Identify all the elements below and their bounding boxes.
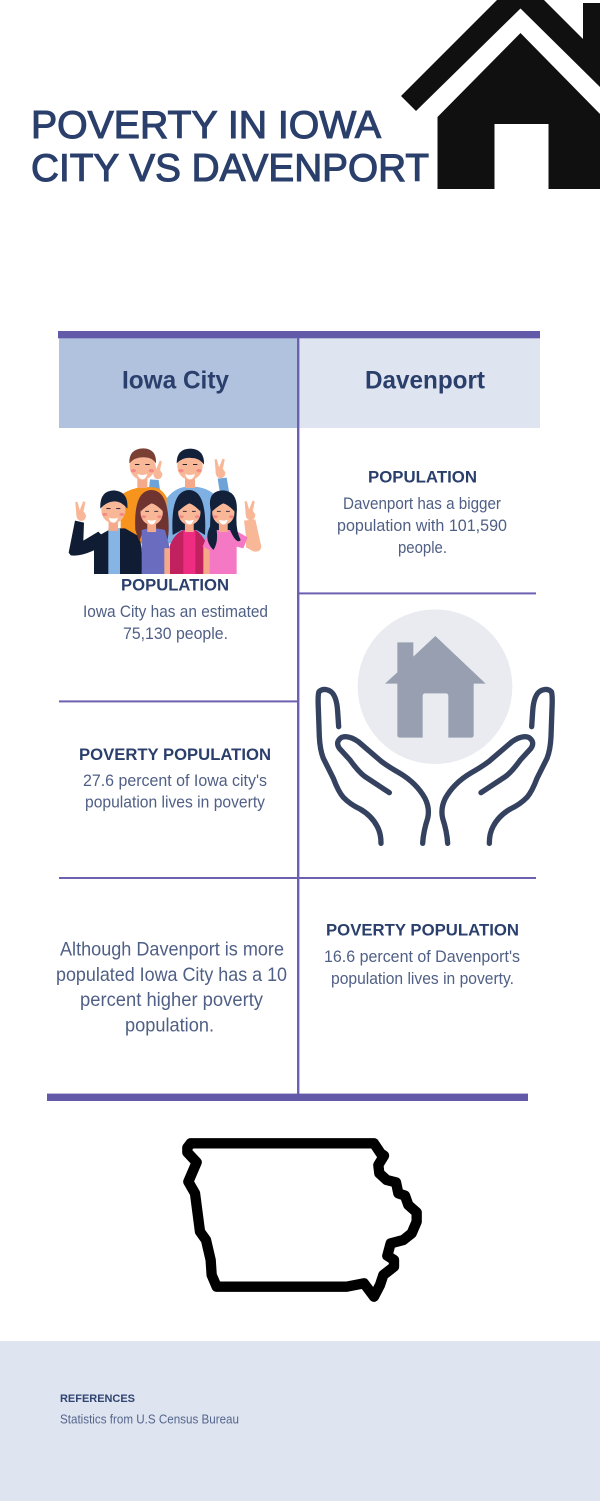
title <box>31 104 429 190</box>
text block: Iowa City poverty population: 27.6 percent of Iowa city's <box>83 771 267 790</box>
title: CITY VS DAVENPORT <box>31 147 429 190</box>
text block: Iowa City population: 75,130 people. <box>123 624 228 643</box>
icon: black house <box>401 0 600 189</box>
footer: references <box>0 1341 600 1501</box>
text block: Davenport population <box>337 468 507 557</box>
text block: Iowa City poverty population: POVERTY POPULATION <box>79 745 271 764</box>
text block: comparison statement: populated Iowa City has a 10 <box>56 964 287 986</box>
text block: Iowa City population: Iowa City has an estimated <box>83 602 268 621</box>
illustration: group of people <box>69 448 261 574</box>
text block: Davenport poverty population: POVERTY POPULATION <box>326 920 519 940</box>
text block: Iowa City poverty population <box>79 745 271 812</box>
icon: Iowa state outline <box>187 1143 417 1297</box>
text block: comparison statement: population. <box>125 1014 214 1036</box>
circle behind house <box>358 609 512 764</box>
table header: Davenport <box>299 338 540 428</box>
right hand <box>442 689 552 843</box>
house silhouette <box>385 636 486 738</box>
table header: Davenport: Davenport <box>365 366 486 394</box>
text block: Iowa City population: POPULATION <box>121 576 229 594</box>
table header: Iowa City <box>59 338 298 428</box>
text block: Davenport population: POPULATION <box>368 468 477 486</box>
text block: Davenport poverty population <box>324 920 520 988</box>
text block: Davenport population: Davenport has a bigger <box>343 494 501 513</box>
text block: Davenport poverty population: 16.6 percent of Davenport's <box>324 947 520 966</box>
text block: Iowa City population <box>83 576 268 643</box>
references source: Statistics from U.S Census Bureau <box>60 1412 239 1426</box>
title: POVERTY IN IOWA <box>31 104 381 147</box>
icon: hands holding a house <box>318 609 552 843</box>
text block: Iowa City poverty population: population lives in poverty <box>85 792 265 812</box>
text block: Davenport population: population with 101,590 <box>337 516 507 535</box>
table header: Iowa City: Iowa City <box>122 366 229 394</box>
left hand <box>318 689 428 843</box>
text block: Davenport poverty population: population lives in poverty. <box>331 969 514 988</box>
references heading: REFERENCES <box>60 1393 135 1405</box>
text block: comparison statement: Although Davenport is more <box>60 938 284 960</box>
text block: comparison statement: percent higher poverty <box>80 989 263 1011</box>
text block: comparison statement <box>56 938 287 1036</box>
text block: Davenport population: people. <box>398 538 447 557</box>
